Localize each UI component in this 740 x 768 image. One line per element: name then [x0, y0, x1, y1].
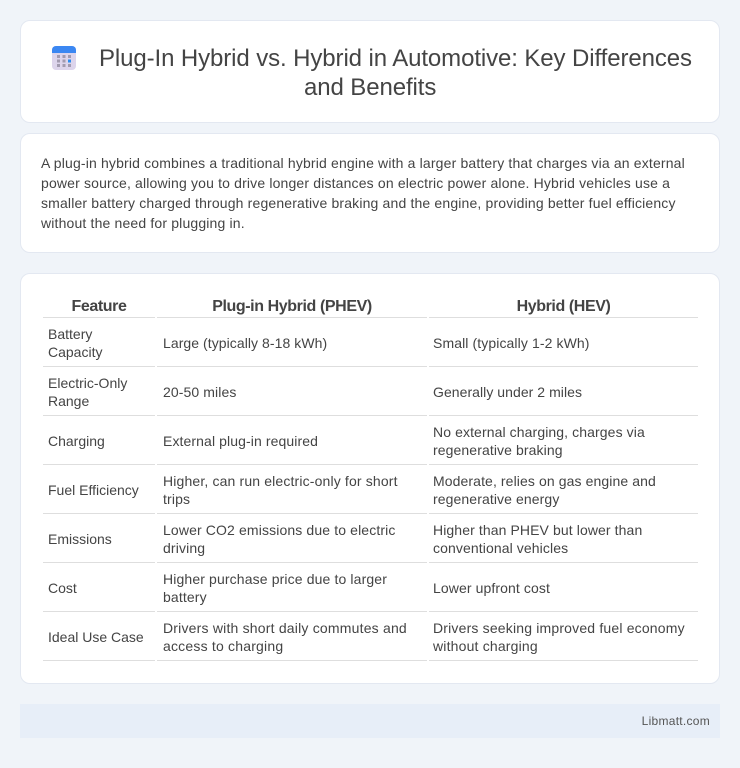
row: emissions: Higher than PHEV but lower than [433, 522, 642, 538]
row: battery capacity: Small (typically 1-2 kWh) [433, 335, 590, 351]
row: cost: Higher purchase price due to larger [163, 571, 387, 587]
panel: intro card [20, 133, 720, 253]
row: emissions: Emissions [48, 531, 112, 547]
row: electric-only range [43, 375, 698, 416]
row: cost [43, 571, 698, 612]
panel: title card [20, 20, 720, 123]
row: electric-only range: Generally under 2 miles [433, 384, 582, 400]
icon: calendar grid [52, 46, 76, 70]
row: cost: Cost [48, 580, 77, 596]
row: ideal use case: access to charging [163, 638, 283, 654]
row: fuel efficiency: trips [163, 491, 190, 507]
row: charging: No external charging, charges via [433, 424, 645, 440]
row: emissions: driving [163, 540, 205, 556]
title: and Benefits [304, 74, 436, 101]
row: emissions: conventional vehicles [433, 540, 568, 556]
intro text: smaller battery charged through regenerative braking and the engine, providing better fuel efficiency [41, 195, 676, 211]
panel: comparison table card [20, 273, 720, 684]
row: emissions [43, 522, 698, 563]
intro text [41, 155, 685, 231]
row: battery capacity: Battery [48, 326, 92, 342]
table header: Plug-in Hybrid (PHEV) [212, 298, 372, 315]
title: Plug-In Hybrid vs. Hybrid in Automotive: Key Differences [99, 45, 692, 72]
row: charging: Charging [48, 433, 105, 449]
intro text: without the need for plugging in. [41, 215, 245, 231]
table header: Hybrid (HEV) [517, 298, 610, 315]
row: fuel efficiency [43, 473, 698, 514]
row: battery capacity: Capacity [48, 344, 102, 360]
footer text: Libmatt.com: Libmatt.com [642, 714, 710, 728]
title [99, 45, 692, 101]
row: cost: Lower upfront cost [433, 580, 550, 596]
table header: Feature [72, 298, 126, 315]
row: cost: battery [163, 589, 207, 605]
row: charging: regenerative braking [433, 442, 563, 458]
row: ideal use case: Drivers with short daily commutes and [163, 620, 407, 636]
row: fuel efficiency: Higher, can run electric-only for short [163, 473, 398, 489]
row: charging: External plug-in required [163, 433, 318, 449]
row: battery capacity [43, 326, 698, 367]
row: fuel efficiency: Fuel Efficiency [48, 482, 139, 498]
intro text: A plug-in hybrid combines a traditional hybrid engine with a larger battery that charges via an external [41, 155, 685, 171]
row: battery capacity: Large (typically 8-18 kWh) [163, 335, 327, 351]
row: electric-only range: Electric-Only [48, 375, 127, 391]
row: electric-only range: 20-50 miles [163, 384, 236, 400]
table header [43, 298, 698, 318]
footer bar [20, 704, 720, 738]
row: emissions: Lower CO2 emissions due to electric [163, 522, 396, 538]
intro text: power source, allowing you to drive longer distances on electric power alone. Hybrid vehicles use a [41, 175, 670, 191]
row: charging [43, 424, 698, 465]
row: ideal use case: Drivers seeking improved fuel economy [433, 620, 685, 636]
row: ideal use case: without charging [433, 638, 538, 654]
row: fuel efficiency: regenerative energy [433, 491, 559, 507]
row: ideal use case [43, 620, 698, 661]
row: electric-only range: Range [48, 393, 89, 409]
row: fuel efficiency: Moderate, relies on gas engine and [433, 473, 656, 489]
comparison table [43, 298, 698, 661]
row: ideal use case: Ideal Use Case [48, 629, 144, 645]
